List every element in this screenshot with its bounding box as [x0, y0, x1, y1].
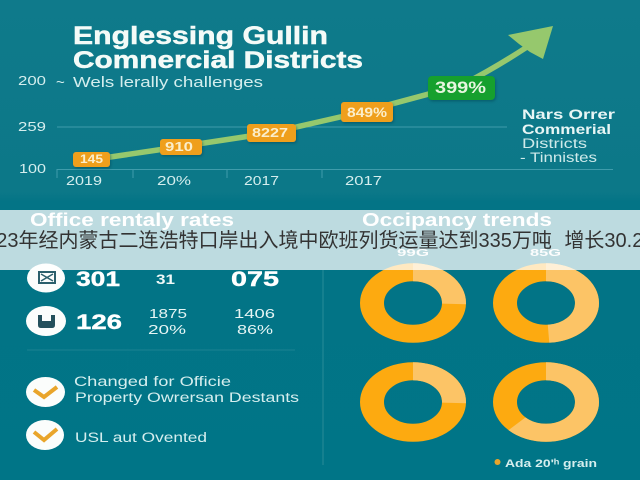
- badge 399%: 399%: [435, 79, 486, 97]
- x axis labels: [66, 173, 382, 188]
- stat row 2: 1406: [234, 306, 275, 321]
- checklist item 2: USL aut Ovented: [75, 430, 207, 445]
- badge 910: 910: [165, 139, 193, 154]
- checklist item 1: Property Owrersan Destants: [75, 390, 299, 405]
- checklist item 1: [26, 374, 299, 407]
- stat row 1: 31: [156, 272, 176, 287]
- subtitle: ~: [56, 74, 65, 91]
- chart axes: [57, 127, 613, 178]
- trend arrow: [90, 26, 553, 160]
- legend: Ada 20'ʰ grain: [505, 458, 597, 470]
- stat row 2: [26, 306, 275, 337]
- y axis labels: [18, 73, 46, 176]
- donut chart 1: [372, 272, 454, 334]
- side note: Commerial: [522, 122, 611, 137]
- badge 145: 145: [80, 152, 103, 166]
- icon: storefront: [26, 306, 66, 336]
- x axis labels: 20%: [157, 173, 192, 188]
- donut chart 4: [505, 371, 587, 433]
- checklist item 2: [26, 420, 207, 450]
- donut labels: 85G: [530, 248, 561, 259]
- badge 8227: 8227: [252, 125, 288, 140]
- panel: office rental rates: [26, 210, 299, 450]
- side note: Nars Orrer: [522, 107, 616, 122]
- x axis labels: 2019: [66, 173, 102, 188]
- badge 910: [160, 139, 202, 155]
- title: Englessing Gullin: [73, 22, 328, 50]
- badge 399%: [428, 76, 495, 100]
- side note: [520, 107, 616, 165]
- badge 849%: [341, 102, 393, 122]
- checklist item 1: Changed for Officie: [74, 374, 231, 389]
- line chart: [18, 26, 613, 188]
- donut chart 2: [505, 272, 587, 334]
- stat row 1: [27, 264, 279, 292]
- stat row 1: 075: [231, 268, 279, 291]
- badge 849%: 849%: [347, 104, 388, 120]
- icon: building: [27, 264, 65, 292]
- panel: occupancy trends: [362, 210, 597, 470]
- y axis labels: 200: [18, 73, 46, 88]
- panel heading: Office rentaly rates: [30, 210, 234, 230]
- x axis labels: 2017: [244, 173, 279, 188]
- title: Comnercial Districts: [73, 47, 363, 74]
- badge 145: [73, 152, 110, 167]
- x axis labels: 2017: [345, 173, 382, 188]
- side note: Districts: [522, 136, 587, 151]
- donut labels: [397, 248, 561, 259]
- icon: check: [26, 420, 64, 450]
- title: [73, 22, 363, 74]
- y axis labels: 259: [18, 119, 46, 134]
- icon: check: [26, 377, 65, 407]
- stat row 1: 301: [76, 268, 120, 291]
- donut labels: 99G: [397, 248, 429, 259]
- y axis labels: 100: [19, 161, 46, 176]
- donut chart 3: [372, 371, 454, 433]
- stat row 2: 20%: [148, 322, 187, 337]
- stat row 2: 86%: [237, 322, 274, 337]
- stat row 2: 1875: [149, 306, 187, 321]
- caption overlay band: [0, 210, 640, 270]
- side note: - Tinnistes: [520, 150, 597, 165]
- badge 8227: [247, 124, 296, 142]
- panel heading: Occipancy trends: [362, 210, 552, 230]
- subtitle: Wels lerally challenges: [73, 74, 263, 91]
- stat row 2: 126: [76, 311, 122, 334]
